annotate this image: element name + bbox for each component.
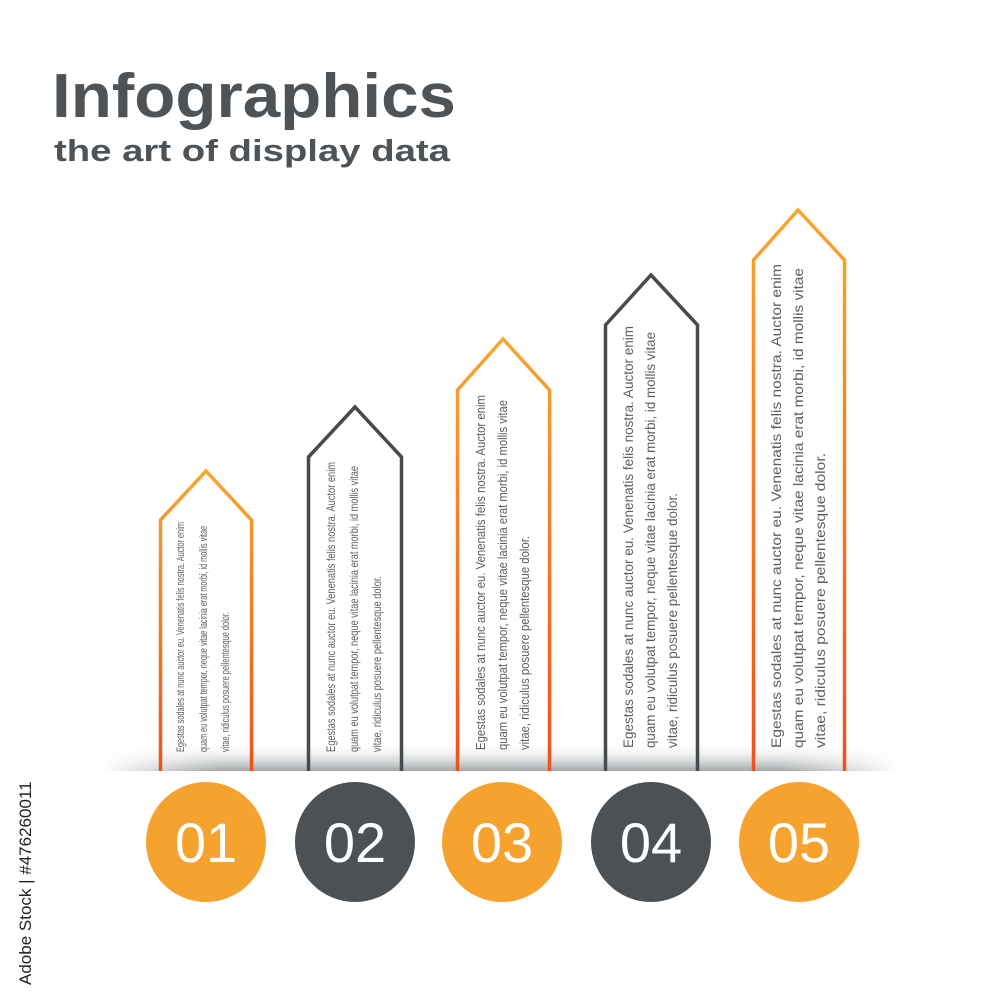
arrow 2	[308, 407, 402, 771]
base shadow	[100, 742, 900, 771]
circle 03	[442, 782, 562, 902]
arrow 4	[606, 275, 698, 771]
arrow 3: vitae, ridiculus posuere pellentesque dolor.	[517, 536, 532, 750]
arrow 2: Egestas sodales at nunc auctor eu. Venenatis felis nostra. Auctor enim	[324, 462, 338, 752]
arrow 4: Egestas sodales at nunc auctor eu. Venenatis felis nostra. Auctor enim	[621, 326, 636, 748]
arrow 3: Egestas sodales at nunc auctor eu. Venenatis felis nostra. Auctor enim	[473, 395, 488, 750]
title: Infographics	[52, 62, 456, 131]
circle 01: 01	[175, 811, 237, 874]
arrow 1: quam eu volutpat tempor, neque vitae lacinia erat morbi, id mollis vitae	[198, 526, 210, 752]
side stock id: Adobe Stock | #476260011	[16, 781, 35, 985]
arrow 2: vitae, ridiculus posuere pellentesque dolor.	[370, 576, 384, 752]
subtitle: the art of display data	[54, 133, 451, 168]
arrow 1: Egestas sodales at nunc auctor eu. Venenatis felis nostra. Auctor enim	[175, 522, 187, 752]
arrow 3	[458, 339, 550, 771]
arrow 2: quam eu volutpat tempor, neque vitae lacinia erat morbi, id mollis vitae	[347, 466, 361, 752]
circle 02	[295, 782, 415, 902]
arrow 5: Egestas sodales at nunc auctor eu. Venenatis felis nostra. Auctor enim	[768, 264, 784, 748]
arrow 5: quam eu volutpat tempor, neque vitae lacinia erat morbi, id mollis vitae	[790, 268, 806, 748]
arrow 1: vitae, ridiculus posuere pellentesque dolor.	[220, 612, 232, 752]
circle 03: 03	[471, 811, 533, 874]
circle 02: 02	[324, 811, 386, 874]
arrow 5: vitae, ridiculus posuere pellentesque dolor.	[812, 453, 828, 748]
arrow 4: quam eu volutpat tempor, neque vitae lacinia erat morbi, id mollis vitae	[643, 332, 658, 748]
arrow 1	[160, 471, 252, 771]
circle 04: 04	[620, 811, 682, 874]
circle 01	[146, 782, 266, 902]
circle 04	[591, 782, 711, 902]
circle 05	[739, 782, 859, 902]
circle 05: 05	[768, 811, 830, 874]
arrow 5	[754, 210, 844, 771]
arrow 3: quam eu volutpat tempor, neque vitae lacinia erat morbi, id mollis vitae	[495, 400, 510, 750]
arrow 4: vitae, ridiculus posuere pellentesque dolor.	[665, 493, 680, 748]
